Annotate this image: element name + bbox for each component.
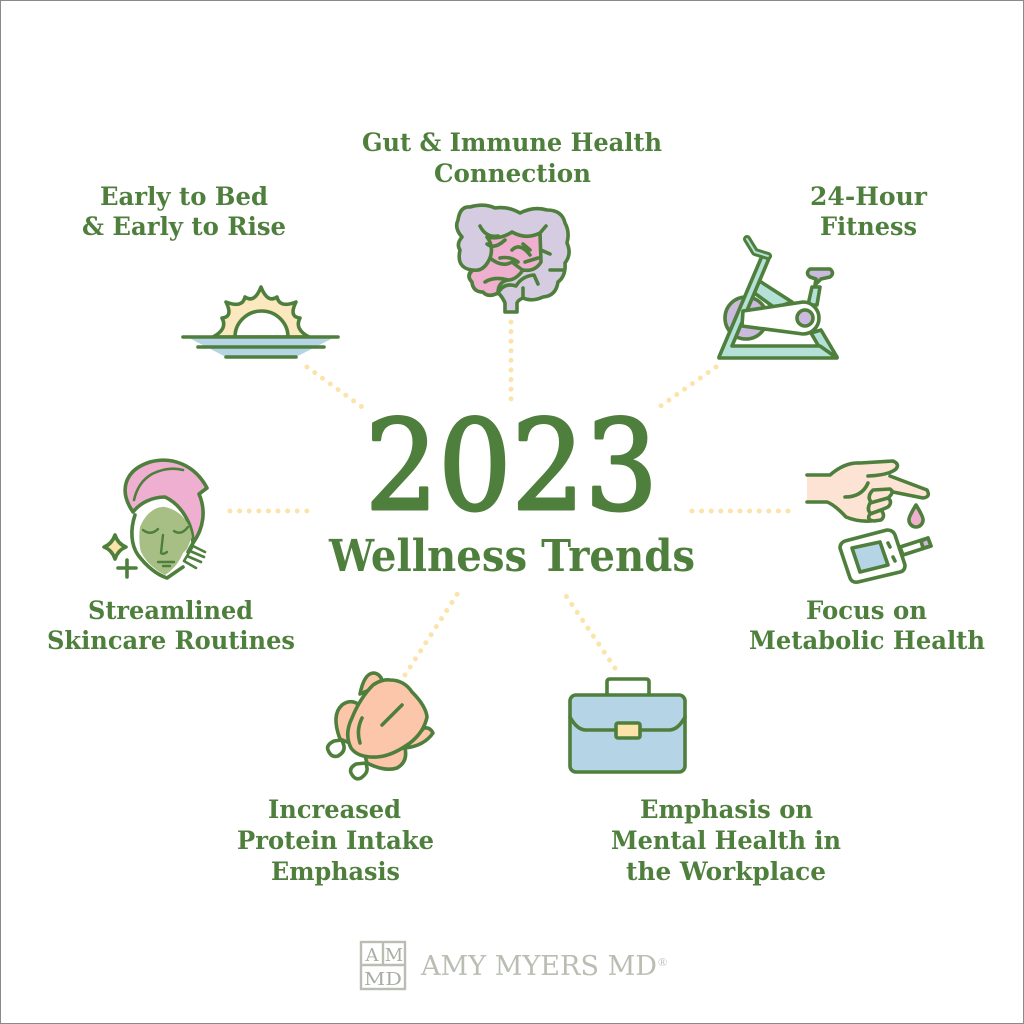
- logo mark: M: [385, 945, 403, 966]
- panel: early to bed: [82, 182, 362, 407]
- connector: [405, 590, 460, 675]
- heading: [47, 596, 295, 655]
- panel: skincare routines: [47, 460, 312, 655]
- icon: exercise bike: [719, 239, 837, 358]
- icon: roast chicken: [328, 673, 433, 779]
- heading: Fitness: [820, 212, 917, 241]
- heading: Metabolic Health: [749, 626, 985, 655]
- panel: increased protein intake: [237, 590, 460, 886]
- heading: Early to Bed: [100, 182, 268, 211]
- connector: [692, 508, 795, 514]
- panel: 24-hour fitness: [655, 182, 928, 410]
- icon: face mask and towel: [104, 460, 207, 578]
- logo wordmark: AMY MYERS MD: [420, 951, 657, 982]
- logo mark: MD: [364, 969, 402, 990]
- heading: 24-Hour: [810, 182, 928, 211]
- heading: & Early to Rise: [82, 212, 286, 241]
- heading: Focus on: [806, 596, 927, 625]
- icon: hand and glucose meter: [807, 461, 931, 582]
- icon: briefcase: [570, 679, 685, 772]
- heading: Protein Intake: [237, 826, 434, 855]
- connector: [562, 590, 615, 668]
- heading: Streamlined: [88, 596, 253, 625]
- heading: [749, 596, 985, 655]
- connector: [307, 367, 362, 407]
- heading: Emphasis: [271, 857, 400, 886]
- connector: [508, 322, 514, 406]
- panel: gut and immune health: [362, 128, 662, 406]
- connector: [655, 367, 716, 410]
- panel: metabolic health: [692, 461, 985, 655]
- connector: [230, 508, 312, 514]
- heading: Connection: [434, 159, 591, 188]
- heading: [810, 182, 928, 241]
- icon: sunrise: [183, 287, 338, 357]
- heading: Mental Health in: [611, 826, 841, 855]
- heading: Gut & Immune Health: [362, 128, 662, 157]
- registered mark: ®: [658, 955, 667, 969]
- heading: [82, 182, 286, 241]
- heading: Skincare Routines: [47, 626, 295, 655]
- subtitle: Wellness Trends: [328, 531, 695, 582]
- heading: Emphasis on: [640, 795, 813, 824]
- icon: intestines: [457, 205, 569, 312]
- logo mark: A: [364, 945, 380, 966]
- title: 2023 Wellness Trends: [328, 394, 695, 582]
- year: 2023: [365, 394, 658, 539]
- heading: the Workplace: [626, 857, 826, 886]
- logo mark: [361, 942, 405, 990]
- logo: Amy Myers MD: [361, 942, 667, 990]
- panel: mental health in the workplace: [562, 590, 841, 886]
- heading: [237, 795, 434, 886]
- heading: [611, 795, 841, 886]
- heading: [362, 128, 662, 188]
- heading: Increased: [268, 795, 401, 824]
